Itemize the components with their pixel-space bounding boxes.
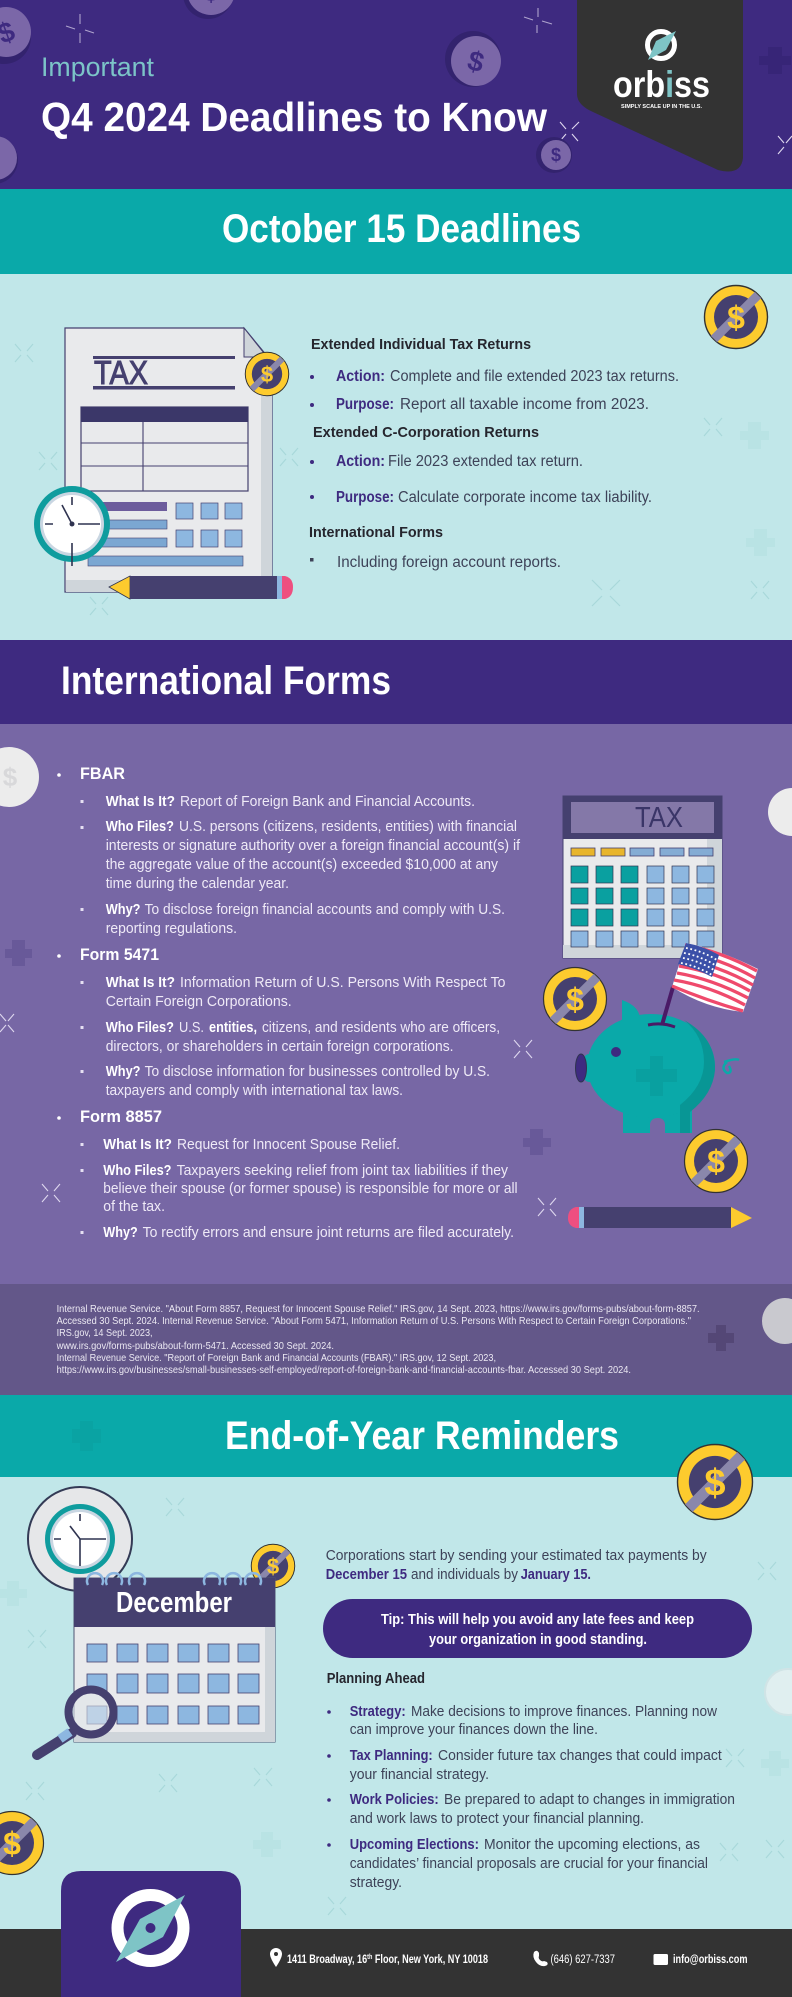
panel: sources: Accessed 30 Sept. 2024. Internal Revenue Service. "About Form 5471, Information Return of U.S. Persons With Respect to Certain Foreign Corporations.": [57, 1315, 691, 1327]
text block: Form 8857: To rectify errors and ensure joint returns are filed accurately.: [143, 1225, 514, 1241]
icon: coin right of piggy bank: $: [707, 1144, 725, 1180]
panel: sources: IRS.gov, 14 Sept. 2023,: [57, 1327, 153, 1339]
text block: individual returns: Extended Individual Tax Returns: [311, 336, 531, 353]
icon: bottom-left coin: [0, 1812, 44, 1874]
text block: international forms: International Forms: [309, 524, 443, 541]
panel: International Forms details: [0, 724, 792, 1284]
header coins: $: [464, 44, 488, 79]
panel: International Forms details: $: [3, 762, 18, 792]
text block: Form 5471: Certain Foreign Corporations.: [106, 994, 292, 1010]
panel: October deadlines: [0, 274, 792, 640]
text block: estimated payments: [326, 1548, 707, 1583]
icon: magnifying glass: [37, 1690, 114, 1755]
panel: sources: Internal Revenue Service. "Report of Foreign Bank and Financial Accounts (FBAR)." IRS.gov, 12 Sept. 2023,: [57, 1352, 496, 1364]
logo panel: [577, 0, 743, 172]
icon: tax document: [65, 328, 272, 592]
text block: individual returns: Complete and file extended 2023 tax returns.: [390, 368, 679, 385]
text block: FBAR: the aggregate value of the account(s) exceeded $10,000 at any: [106, 857, 499, 873]
text block: Form 5471: taxpayers and comply with international tax laws.: [106, 1083, 403, 1099]
text block: FBAR: [57, 764, 521, 937]
callout: tip: [323, 1599, 752, 1658]
text block: Form 8857: What Is It?: [103, 1137, 172, 1153]
icon: calendar: December: [116, 1587, 232, 1619]
list: planning items: Strategy:: [350, 1704, 406, 1720]
icon: coin on calendar: $: [267, 1554, 279, 1579]
text block: international forms: [309, 524, 561, 571]
logo panel: orbiss: [613, 64, 710, 105]
icon: calendar: [74, 1573, 275, 1742]
text block: Form 8857: [57, 1107, 518, 1241]
icon: wall clock: [28, 1487, 132, 1591]
icon: tax document: TAX: [94, 354, 148, 391]
contact: phone: (646) 627-7337: [550, 1954, 615, 1966]
list: planning items: Monitor the upcoming elections, as: [484, 1837, 700, 1853]
text block: Form 5471: Form 5471: [80, 945, 159, 964]
heading: Planning Ahead: Planning Ahead: [327, 1671, 425, 1687]
text block: Form 5471: U.S.: [179, 1020, 204, 1036]
footer: [0, 1871, 792, 1997]
text block: Form 8857: of the tax.: [103, 1199, 165, 1215]
text block: FBAR: Report of Foreign Bank and Financial Accounts.: [180, 794, 475, 810]
text block: C-corporation returns: Calculate corporate income tax liability.: [398, 489, 652, 506]
list: planning items: candidates’ financial proposals are crucial for your financial: [350, 1856, 708, 1872]
callout: tip: your organization in good standing.: [429, 1631, 647, 1648]
text block: Form 5471: Information Return of U.S. Persons With Respect To: [180, 975, 506, 991]
panel: sources: www.irs.gov/forms-pubs/about-form-5471. Accessed 30 Sept. 2024.: [56, 1340, 334, 1352]
text block: FBAR: Who Files?: [106, 819, 174, 835]
list: planning items: and work laws to protect your financial planning.: [350, 1811, 644, 1827]
text block: Form 5471: entities,: [209, 1020, 257, 1036]
icon: coin left of piggy bank: $: [566, 982, 584, 1018]
text block: FBAR: reporting regulations.: [106, 921, 237, 937]
text block: FBAR: time during the calendar year.: [106, 876, 289, 892]
text block: C-corporation returns: [310, 424, 652, 506]
text block: international forms: Including foreign account reports.: [337, 554, 561, 571]
contact: email: [654, 1954, 748, 1966]
text block: FBAR: What Is It?: [106, 794, 175, 810]
logo panel: SIMPLY SCALE UP IN THE U.S.: [621, 104, 703, 110]
header coins: $: [551, 145, 561, 165]
list: planning items: Work Policies:: [350, 1792, 439, 1808]
icon: coin on document: $: [261, 362, 273, 387]
text block: Form 8857: Form 8857: [80, 1107, 162, 1126]
panel: sources: Internal Revenue Service. "About Form 8857, Request for Innocent Spouse Relief." IRS.gov, 14 Sept. 2023, https://www.irs.gov/forms-pubs/about-form-8857.: [57, 1303, 700, 1315]
list: planning items: can improve your finances down the line.: [350, 1722, 598, 1738]
header band: [0, 0, 792, 189]
section band: International Forms: International Forms: [61, 659, 391, 703]
section band: End-of-Year Reminders: [0, 1395, 792, 1477]
list: planning items: [327, 1704, 735, 1891]
section band: October 15 Deadlines: [0, 189, 792, 274]
header coins: [0, 0, 572, 184]
icon: coin on document: [245, 352, 289, 396]
icon: top-right coin in reminders: [678, 1445, 752, 1519]
text block: Form 5471: [57, 945, 505, 1099]
text block: individual returns: Report all taxable income from 2023.: [400, 396, 649, 413]
text block: individual returns: Purpose:: [336, 396, 394, 413]
text block: estimated payments: and individuals by: [411, 1567, 519, 1583]
text block: estimated payments: December 15: [326, 1567, 407, 1583]
text block: C-corporation returns: Action:: [336, 453, 385, 470]
text block: estimated payments: Corporations start by sending your estimated tax payments by: [326, 1548, 707, 1564]
list: planning items: Tax Planning:: [350, 1748, 433, 1764]
callout: tip: Tip: This will help you avoid any late fees and keep: [381, 1611, 694, 1628]
section band: International Forms: [0, 640, 792, 724]
list: planning items: Consider future tax changes that could impact: [438, 1748, 722, 1764]
title: Q4 2024 Deadlines to Know: [41, 94, 547, 140]
text block: Form 8857: believe their spouse (or former spouse) is responsible for more or all: [103, 1181, 518, 1197]
icon: large coin: [704, 286, 768, 348]
contact: email: info@orbiss.com: [673, 1954, 748, 1966]
icon: pencil: [109, 576, 293, 599]
list: planning items: Upcoming Elections:: [350, 1837, 479, 1853]
text block: Form 8857: Who Files?: [103, 1163, 172, 1179]
list: planning items: Make decisions to improve finances. Planning now: [411, 1704, 717, 1720]
text block: FBAR: To disclose foreign financial accounts and comply with U.S.: [145, 902, 505, 918]
text block: C-corporation returns: Purpose:: [336, 489, 394, 506]
text block: Form 5471: What Is It?: [106, 975, 175, 991]
icon: clock: [34, 486, 110, 566]
text block: Form 8857: Request for Innocent Spouse Relief.: [177, 1137, 400, 1153]
icon: bottom-left coin: $: [3, 1826, 21, 1862]
text block: FBAR: FBAR: [80, 764, 125, 783]
section band: October 15 Deadlines: October 15 Deadlines: [222, 207, 581, 251]
text block: FBAR: U.S. persons (citizens, residents, entities) with financial: [179, 819, 517, 835]
icon: pencil: [568, 1207, 752, 1228]
panel: End-of-Year content: [0, 1477, 792, 1929]
text block: Form 5471: Who Files?: [106, 1020, 174, 1036]
text block: Form 5471: directors, or shareholders in certain foreign corporations.: [106, 1039, 453, 1055]
text block: Form 5471: Why?: [106, 1064, 141, 1080]
text block: Form 5471: To disclose information for businesses controlled by U.S.: [145, 1064, 490, 1080]
icon: top-right coin in reminders: $: [704, 1463, 726, 1505]
text block: C-corporation returns: File 2023 extended tax return.: [388, 453, 583, 470]
contact: phone: [533, 1951, 615, 1966]
icon: coin left of piggy bank: [544, 968, 606, 1030]
icon: large coin: $: [727, 300, 745, 336]
text block: Form 8857: Taxpayers seeking relief from joint tax liabilities if they: [177, 1163, 509, 1179]
text block: Form 8857: Why?: [103, 1225, 138, 1241]
contact: address: 1411 Broadway, 16: [287, 1954, 388, 1966]
logo tab: [61, 1871, 241, 1997]
text block: FBAR: interests or signature authority over a foreign financial account(s) if: [106, 838, 521, 854]
panel: sources: https://www.irs.gov/businesses/small-businesses-self-employed/report-of-foreign-bank-and-financial-accounts-fbar. Accessed 30 Sept. 2024.: [57, 1364, 631, 1376]
icon: coin right of piggy bank: [684, 1130, 748, 1192]
contact: address: th: [367, 1954, 372, 1961]
contact: address: [270, 1948, 488, 1967]
list: planning items: Be prepared to adapt to changes in immigration: [444, 1792, 735, 1808]
icon: calculator: [563, 796, 722, 958]
list: planning items: strategy.: [350, 1875, 402, 1891]
icon: coin on calendar: [251, 1544, 295, 1588]
text block: estimated payments: January 15.: [521, 1567, 591, 1583]
eyebrow: Important: Important: [41, 52, 154, 82]
panel: sources: [0, 1284, 792, 1395]
text block: individual returns: [310, 336, 679, 413]
text block: FBAR: Why?: [106, 902, 141, 918]
icon: calculator: TAX: [635, 802, 683, 834]
section band: End-of-Year Reminders: End-of-Year Reminders: [225, 1414, 619, 1458]
text block: C-corporation returns: Extended C-Corporation Returns: [313, 424, 539, 441]
contact: address: Floor, New York, NY 10018: [372, 1954, 488, 1966]
icon: piggy bank with flag: [576, 943, 758, 1133]
list: planning items: your financial strategy.: [350, 1767, 489, 1783]
text block: Form 5471: citizens, and residents who are officers,: [262, 1020, 500, 1036]
text block: individual returns: Action:: [336, 368, 385, 385]
